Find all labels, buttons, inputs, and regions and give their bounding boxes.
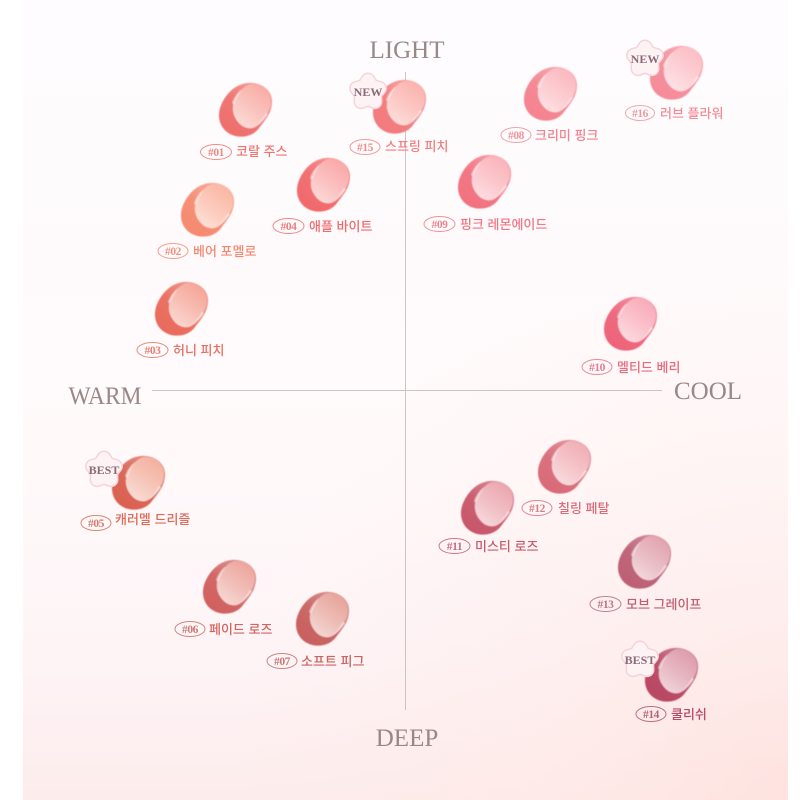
swatch #11: #11 [447,541,463,553]
swatch #13: #13 [597,599,614,611]
swatch #02: #02 [165,246,182,258]
swatch #10: 멜티드 베리 [617,360,680,375]
swatch #14 with BEST badge: BEST [625,653,655,667]
swatch #08: 크리미 핑크 [535,128,598,143]
swatch #08 [501,67,598,143]
swatch #16 with NEW badge: NEW [631,52,659,66]
swatch #07: #07 [274,656,291,668]
swatch #15 with NEW badge: NEW [354,85,382,99]
axis label: light: LIGHT [370,37,444,64]
swatch #14 with BEST badge [625,648,707,722]
swatch #15 with NEW badge [350,80,448,154]
swatch #12 [522,440,609,516]
vertical axis line [404,72,406,710]
swatch #12: 칠링 페탈 [558,501,609,516]
swatch #10: #10 [589,362,606,374]
swatch #08: #08 [508,130,525,142]
swatch #06: 페이드 로즈 [209,622,272,637]
swatch #15 with NEW badge: 스프링 피치 [385,139,448,154]
swatch #16 with NEW badge: 러브 플라워 [660,106,723,121]
axis label: cool: COOL [674,378,742,405]
swatch #09: #09 [431,219,448,231]
axis label: warm: WARM [68,383,142,410]
horizontal axis line [152,390,662,392]
swatch #04: 애플 바이트 [309,219,372,234]
swatch #14 with BEST badge: #14 [643,709,660,721]
swatch #02: 베어 포멜로 [193,244,256,259]
swatch #05 with BEST badge: 캐러멜 드리즐 [115,512,190,527]
swatch #13: 모브 그레이프 [626,597,701,612]
swatch #03: 허니 피치 [173,343,224,358]
swatch #05 with BEST badge [81,456,190,530]
swatch #04 [273,158,372,234]
swatch #01 [200,83,287,160]
swatch #05 with BEST badge: #05 [88,518,105,530]
swatch #07: 소프트 피그 [301,654,364,669]
swatch #14 with BEST badge: 쿨리쉬 [671,707,707,722]
swatch #11 [439,481,538,554]
swatch #09: 핑크 레몬에이드 [460,217,547,232]
swatch #06 [175,560,272,637]
swatch #15 with NEW badge: #15 [357,142,374,154]
swatch #01: #01 [208,147,225,159]
swatch #16 with NEW badge: #16 [632,108,649,120]
swatch #13 [590,535,701,612]
swatch #01: 코랄 주스 [236,144,287,159]
swatch #16 with NEW badge [626,46,723,121]
axis label: deep: DEEP [376,725,438,752]
swatch #04: #04 [280,221,297,233]
swatch #07 [267,592,364,669]
swatch #03: #03 [144,345,161,357]
swatch #02 [158,183,256,259]
swatch #03 [137,282,224,358]
swatch #06: #06 [182,624,199,636]
swatch #10 [582,297,680,375]
swatch #09 [424,155,547,232]
swatch #05 with BEST badge: BEST [89,463,119,477]
swatch #12: #12 [529,503,546,515]
swatch #11: 미스티 로즈 [475,539,538,554]
